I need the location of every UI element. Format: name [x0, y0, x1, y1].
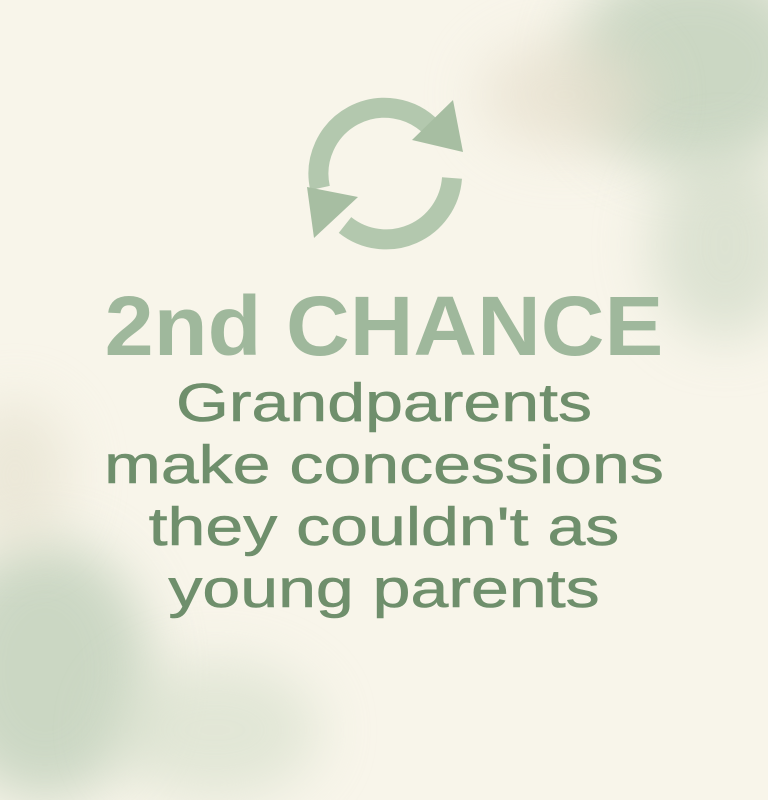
subtitle text: make concessions [104, 435, 664, 495]
subtitle text: they couldn't as [149, 497, 619, 557]
title: 2nd CHANCE [105, 279, 663, 373]
subtitle text: Grandparents [176, 373, 592, 433]
subtitle text: young parents [168, 559, 600, 619]
subtitle text [104, 373, 664, 619]
